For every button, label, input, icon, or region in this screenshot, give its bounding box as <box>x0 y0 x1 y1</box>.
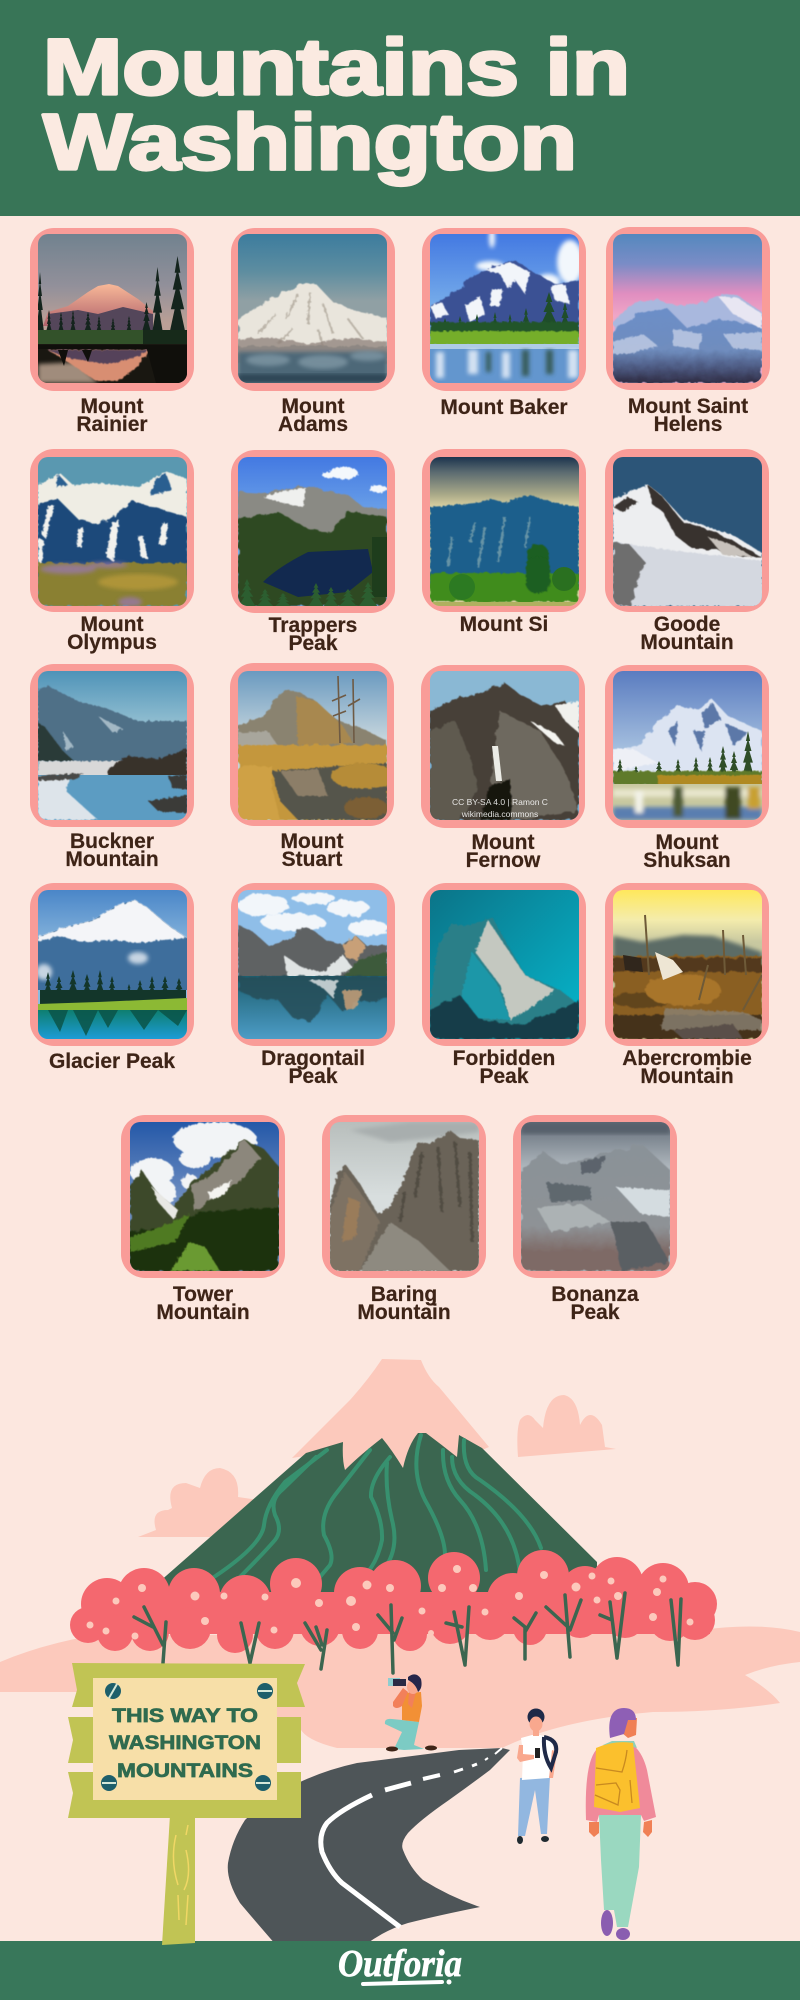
label: Mount <box>282 395 344 418</box>
label: Abercrombie <box>622 1047 752 1070</box>
label: Mount <box>80 395 143 418</box>
photo: Abercrombie Mountain <box>613 890 762 1039</box>
label: Mount Baker <box>440 396 568 419</box>
title <box>41 22 630 188</box>
signpost <box>68 1663 305 1945</box>
photo: Glacier Peak <box>38 890 187 1039</box>
photo: Mount Fernow <box>430 671 579 820</box>
label: Dragontail <box>261 1047 365 1070</box>
photo: Baring Mountain <box>330 1122 479 1271</box>
label: Mount <box>280 830 343 853</box>
label: Mount Si <box>460 613 548 636</box>
label <box>268 614 357 655</box>
trees <box>70 1550 717 1673</box>
photo: Mount Baker <box>430 234 579 383</box>
photo: Tower Mountain <box>130 1122 279 1271</box>
green mountain <box>158 1433 597 1610</box>
label: Bonanza <box>551 1283 639 1306</box>
label <box>278 395 348 436</box>
label: Shuksan <box>643 849 731 872</box>
sign text: THIS WAY TO <box>112 1706 258 1727</box>
label: Glacier Peak <box>49 1050 175 1073</box>
card: Mount Rainier <box>30 228 194 436</box>
footer bar <box>0 1941 800 2000</box>
label: Tower <box>173 1283 233 1306</box>
label: Mount <box>656 831 718 854</box>
road <box>228 1748 510 1945</box>
card: Baring Mountain <box>322 1115 488 1330</box>
label: Mount <box>472 831 534 854</box>
photo: Mount Stuart <box>238 671 387 820</box>
label: Mount <box>80 613 143 636</box>
card: Mount Saint Helens <box>606 227 770 436</box>
card: Dragontail Peak <box>231 883 395 1088</box>
header banner <box>0 0 800 216</box>
label: Forbidden <box>453 1047 555 1070</box>
label <box>261 1047 365 1088</box>
card: Mount Fernow <box>421 665 585 872</box>
sign text <box>109 1706 261 1782</box>
card: Mount Shuksan <box>605 665 769 872</box>
title: Mountains in <box>43 22 630 111</box>
label <box>640 613 734 654</box>
label: Olympus <box>67 631 157 654</box>
planks <box>68 1663 305 1818</box>
card: Mount Olympus <box>30 449 194 654</box>
label: Mount Saint <box>628 395 748 418</box>
pink snow peak <box>292 1359 489 1480</box>
tree blossoms <box>86 1565 694 1640</box>
label: Mountain <box>640 1065 734 1088</box>
label <box>628 395 748 436</box>
label <box>643 831 731 872</box>
label: Trappers <box>269 614 357 637</box>
card: Mount Si <box>422 449 586 636</box>
label: Mountain <box>65 848 159 871</box>
card: Trappers Peak <box>231 450 395 655</box>
card: Mount Stuart <box>230 663 394 871</box>
mountain stripes <box>214 1435 541 1582</box>
label <box>113 1286 293 1322</box>
board <box>93 1678 277 1800</box>
card: Buckner Mountain <box>30 664 194 871</box>
person: photographer <box>385 1674 437 1752</box>
label: Peak <box>288 1065 338 1088</box>
cloud left <box>138 1468 258 1537</box>
photo: Dragontail Peak <box>238 890 387 1039</box>
photo: Mount Fernow: CC BY-SA 4.0 | Ramon C <box>452 797 548 807</box>
screws <box>101 1683 273 1791</box>
card: Forbidden Peak <box>422 883 588 1098</box>
illustration: mountain landscape <box>0 1340 800 2000</box>
photo: Forbidden Peak <box>430 890 579 1039</box>
label <box>414 1050 594 1086</box>
label: Adams <box>278 413 348 436</box>
label: Mountain <box>156 1301 250 1324</box>
tree crowns <box>70 1550 717 1653</box>
label <box>76 395 148 436</box>
label: Mountain <box>640 631 734 654</box>
label <box>67 613 157 654</box>
sign text: MOUNTAINS <box>117 1761 253 1782</box>
photo: Mount Adams <box>238 234 387 383</box>
label <box>505 1286 685 1322</box>
label: Peak <box>288 632 338 655</box>
card: Bonanza Peak <box>513 1115 679 1330</box>
person: hiker with phone <box>517 1708 557 1844</box>
photo: Goode Mountain <box>613 457 762 606</box>
photo: Mount Fernow: wikimedia.commons <box>461 809 538 819</box>
person: hiker with backpack <box>586 1708 656 1940</box>
label: Fernow <box>466 849 540 872</box>
tree trunks <box>134 1593 681 1673</box>
label: Rainier <box>76 413 148 436</box>
label: Peak <box>479 1065 529 1088</box>
photo: Mount Rainier <box>38 234 187 383</box>
title: Washington <box>43 97 577 186</box>
label <box>65 830 159 871</box>
card: Mount Baker <box>422 228 586 419</box>
photo: Mount Saint Helens <box>613 234 762 383</box>
ground pink band <box>0 1626 800 1748</box>
cloud right <box>517 1395 616 1457</box>
photo: Mount Si <box>430 457 579 606</box>
card: Tower Mountain <box>121 1115 287 1330</box>
label <box>280 830 344 871</box>
photo: Mount Shuksan <box>613 671 762 820</box>
label: Mountain <box>357 1301 451 1324</box>
label: Helens <box>654 413 722 436</box>
label: Baring <box>371 1283 437 1306</box>
card: Goode Mountain <box>605 449 769 654</box>
label <box>314 1286 494 1322</box>
card: Mount Adams <box>231 228 395 436</box>
label: Buckner <box>70 830 154 853</box>
photo: Mount Olympus <box>38 457 187 606</box>
label <box>466 831 540 872</box>
photo: Bonanza Peak <box>521 1122 670 1271</box>
sign text: WASHINGTON <box>109 1733 261 1754</box>
label: Stuart <box>282 848 342 871</box>
logo: Outforia: Outforia <box>338 1943 462 1985</box>
post <box>162 1815 195 1945</box>
road markings <box>321 1748 502 1927</box>
photo: Buckner Mountain <box>38 671 187 820</box>
label <box>597 1050 777 1086</box>
card: Abercrombie Mountain <box>605 883 771 1098</box>
card: Glacier Peak <box>30 883 194 1073</box>
label: Peak <box>570 1301 620 1324</box>
label: Goode <box>654 613 720 636</box>
photo: Trappers Peak <box>238 457 387 606</box>
